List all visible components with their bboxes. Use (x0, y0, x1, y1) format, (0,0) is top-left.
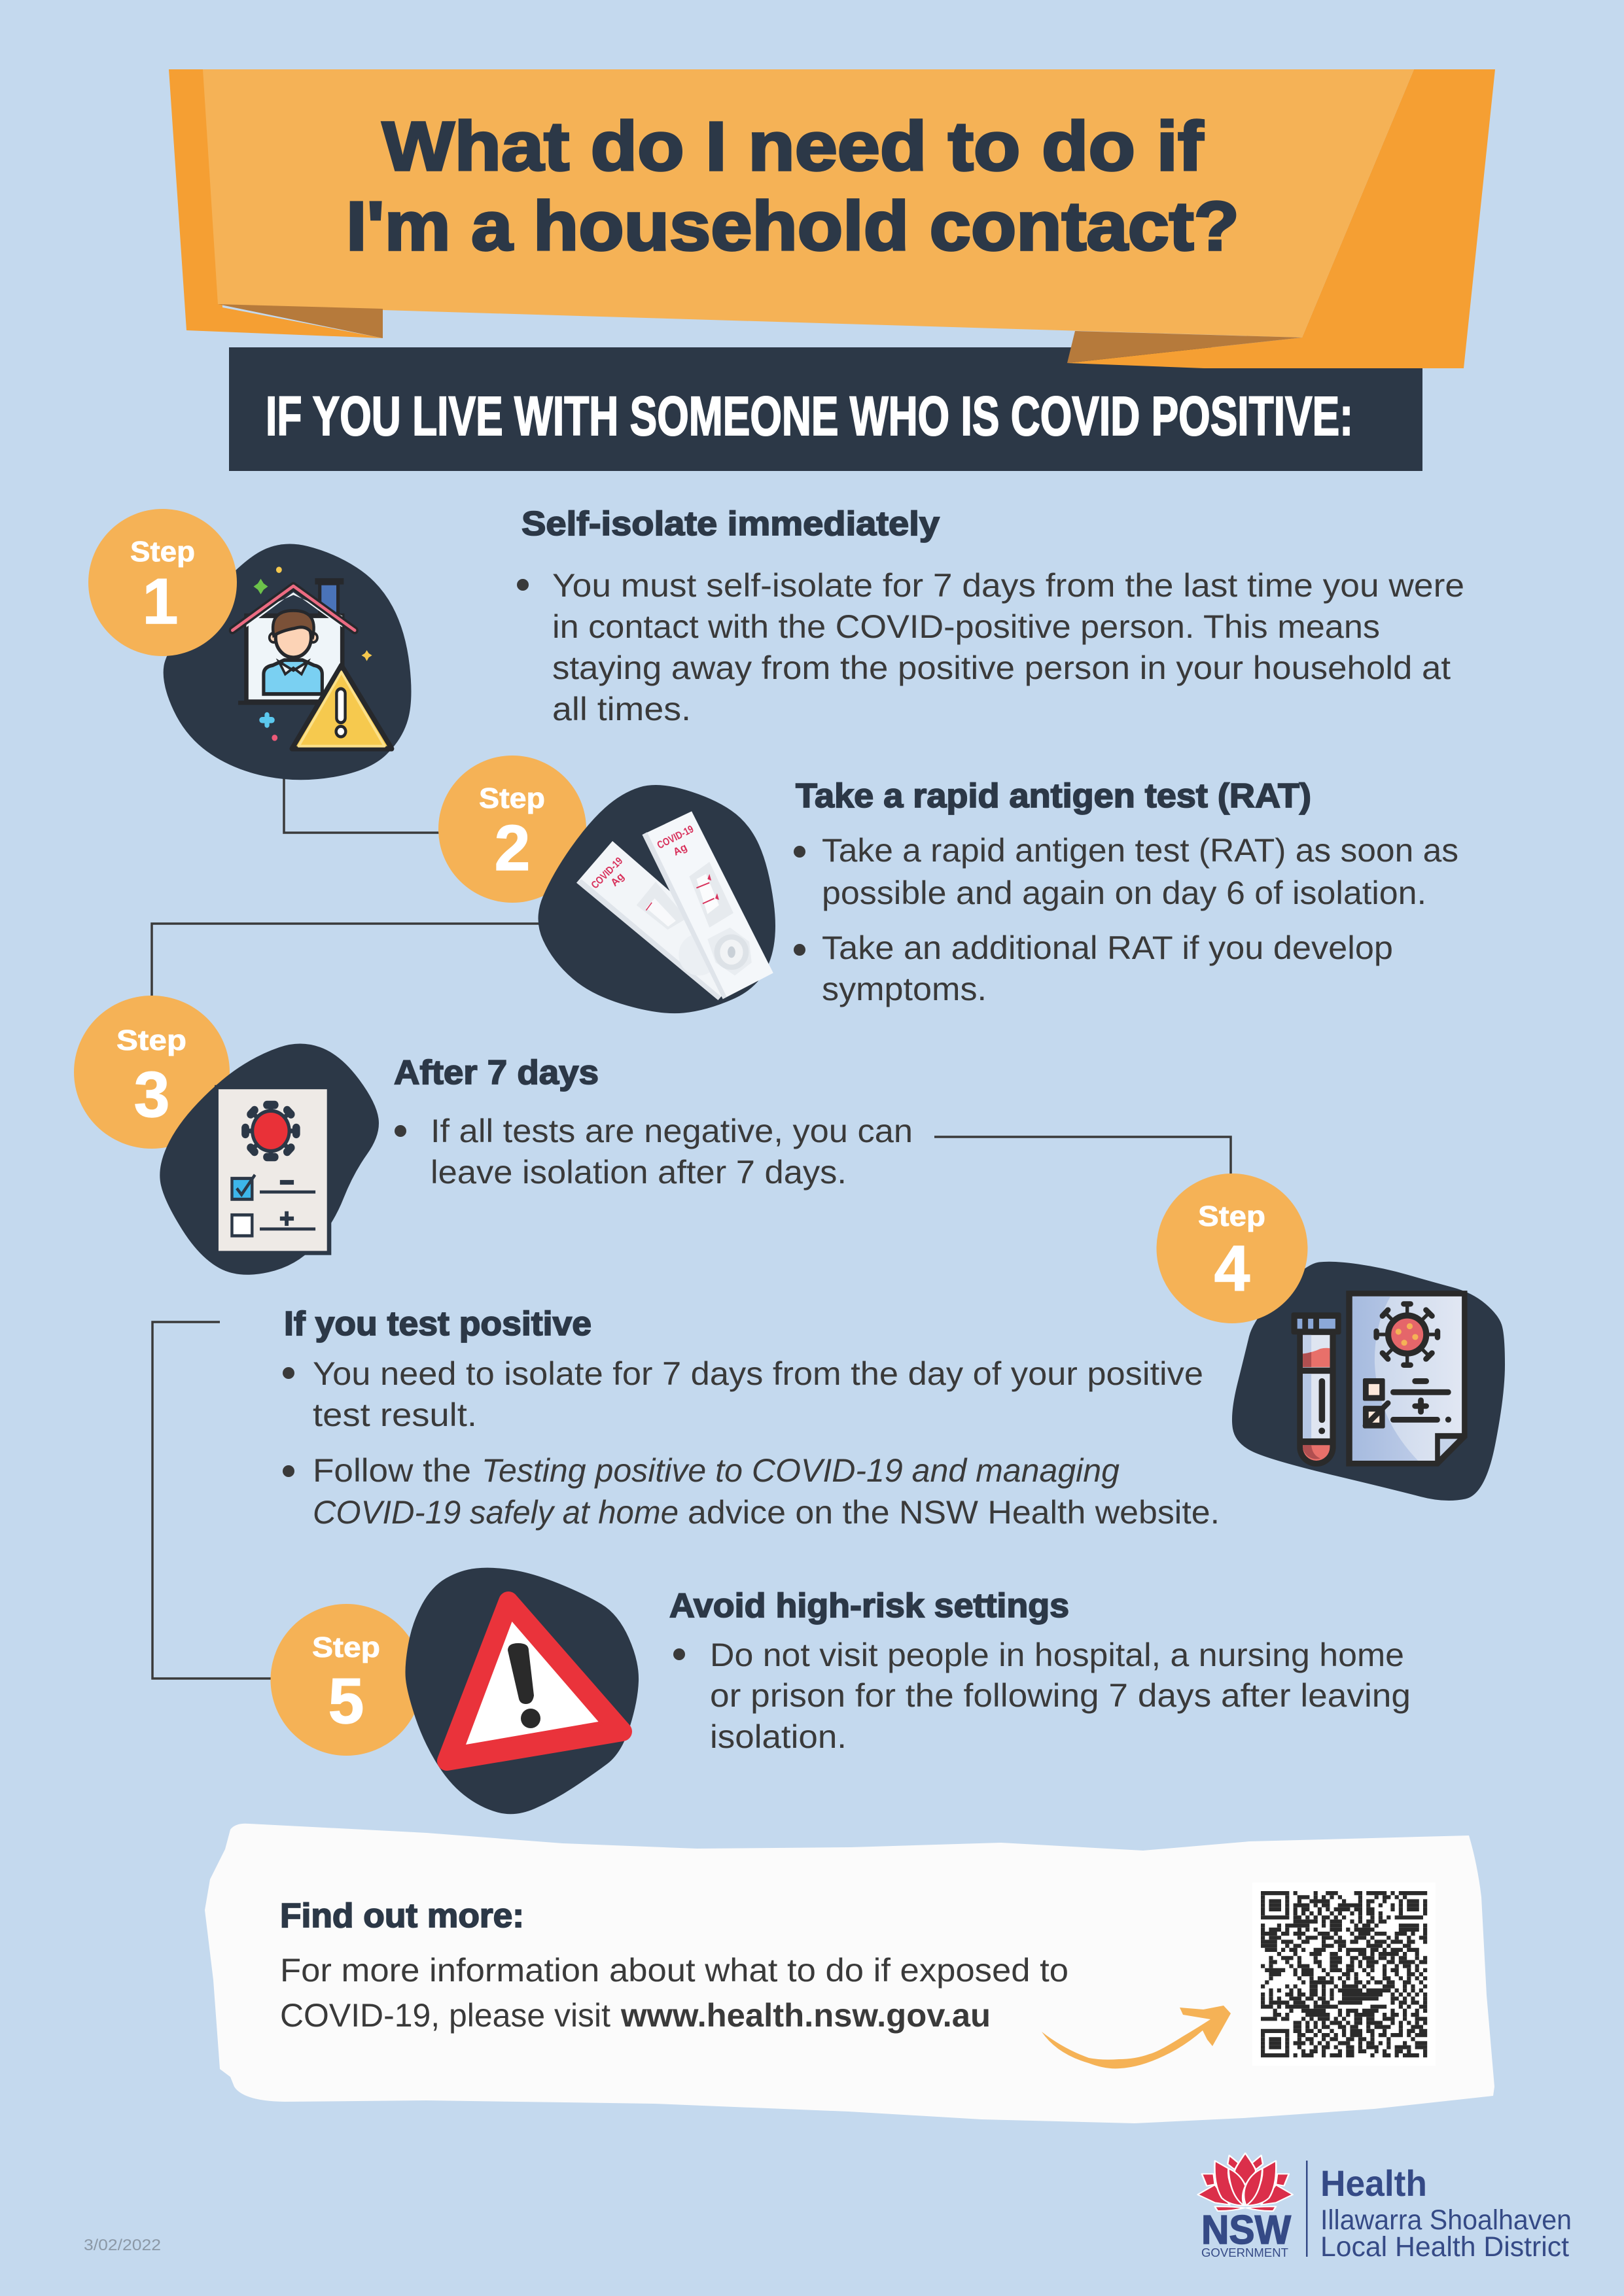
logo: NSW Government Health: Illawarra Shoalhaven (1320, 2204, 1572, 2236)
text block: take a rapid antigen test: symptoms. (822, 971, 987, 1007)
text block: if you test positive (283, 1305, 1220, 1531)
icon backdrop: step 4 blob (1232, 1262, 1505, 1501)
text block: after 7 days: leave isolation after 7 days. (431, 1154, 847, 1191)
report sheet (1346, 1291, 1468, 1467)
date: 3/02/2022 (84, 2236, 161, 2254)
text block: take a rapid antigen test: possible and again on day 6 of isolation. (822, 875, 1426, 911)
step 5 badge: Step (312, 1631, 380, 1663)
logo: NSW Government Health (1198, 2153, 1572, 2263)
test tube (1291, 1312, 1341, 1467)
arrow pointing to QR code (1042, 2006, 1231, 2068)
text block: self-isolate immediately: Self-isolate immediately (521, 505, 940, 543)
text block: self-isolate immediately (517, 505, 1464, 727)
connector: step 2 to step 3 (152, 924, 540, 997)
text block: self-isolate immediately: You must self-isolate for 7 days from the last time you were (552, 567, 1464, 604)
step 2 badge: 2 (495, 812, 530, 884)
logo: NSW Government Health: Health (1320, 2163, 1427, 2204)
step 1 badge: Step (130, 536, 195, 568)
step 4 badge (1157, 1174, 1307, 1323)
logo: NSW Government Health: Local Health District (1320, 2231, 1569, 2263)
text block: after 7 days (394, 1054, 913, 1191)
panel: find out more: www.health.nsw.gov.au (620, 1997, 991, 2034)
step 3 badge (74, 996, 230, 1149)
text block: avoid high-risk settings: isolation. (710, 1718, 847, 1755)
logo: NSW Government Health: NSW (1201, 2208, 1291, 2253)
text block: self-isolate immediately: in contact with the COVID-positive person. This means (552, 608, 1380, 645)
connector: step 3 to step 4 (934, 1137, 1231, 1175)
title banner: I'm a household contact? (346, 188, 1239, 265)
subtitle bar (229, 347, 1422, 471)
text block: take a rapid antigen test (794, 777, 1458, 1007)
text block: avoid high-risk settings: or prison for the following 7 days after leaving (710, 1677, 1411, 1714)
panel: find out more: For more information about what to do if exposed to (280, 1952, 1068, 1989)
text block: if you test positive: Follow the (313, 1452, 471, 1489)
panel: find out more (205, 1824, 1494, 2123)
icon: rapid antigen test strips: COVID-19 (656, 824, 696, 852)
text block: if you test positive: Testing positive to COVID-19 and managing (482, 1452, 1120, 1489)
icon: test result sheet (160, 1044, 379, 1275)
icon: blood tube and virus report (1291, 1291, 1468, 1467)
step 3 badge: 3 (134, 1058, 169, 1130)
text block: if you test positive: You need to isolate for 7 days from the day of your positive (313, 1355, 1203, 1392)
text block: after 7 days: After 7 days (394, 1054, 599, 1092)
text block: avoid high-risk settings (669, 1587, 1411, 1755)
QR code (1252, 1883, 1436, 2066)
icon: rapid antigen test strips: COVID-19 (590, 856, 625, 891)
text block: after 7 days: If all tests are negative, you can (431, 1113, 913, 1149)
text block: avoid high-risk settings: Do not visit people in hospital, a nursing home (710, 1637, 1404, 1673)
title banner (169, 69, 1495, 368)
logo: NSW Government Health: GOVERNMENT (1201, 2246, 1288, 2259)
step 1 badge (88, 509, 237, 656)
title banner: What do I need to do if (382, 108, 1204, 185)
step 1 badge: 1 (143, 565, 178, 637)
text block: self-isolate immediately: all times. (552, 691, 691, 727)
icon: rapid antigen test strips (538, 785, 775, 1013)
panel: find out more: Find out more: (280, 1897, 524, 1935)
panel: find out more: COVID-19, please visit (280, 1997, 610, 2034)
step 2 badge: Step (479, 782, 545, 814)
connector: step 1 to step 2 (284, 775, 440, 833)
connector: step 4 to step 5 (152, 1322, 272, 1679)
icon: rapid antigen test strips: Ag (609, 871, 627, 889)
step 3 badge: Step (116, 1024, 186, 1056)
icon backdrop: step 1 blob (164, 544, 411, 780)
text block: if you test positive: COVID-19 safely at home (313, 1494, 679, 1531)
icon: person at home with warning sign (232, 566, 392, 749)
text block: take a rapid antigen test: Take a rapid antigen test (RAT) as soon as (822, 832, 1458, 869)
icon: rapid antigen test strips: Ag (671, 842, 689, 858)
step 5 badge: 5 (328, 1665, 364, 1737)
icon: warning triangle (406, 1568, 639, 1814)
text block: take a rapid antigen test: Take an additional RAT if you develop (822, 930, 1393, 966)
step 5 badge (271, 1604, 423, 1756)
text block: if you test positive: test result. (313, 1397, 477, 1433)
step 4 badge: 4 (1214, 1232, 1250, 1304)
step 2 badge (438, 756, 586, 903)
text block: self-isolate immediately: staying away from the positive person in your household at (552, 650, 1451, 686)
text block: avoid high-risk settings: Avoid high-risk settings (669, 1587, 1069, 1625)
text block: if you test positive: advice on the NSW Health website. (688, 1494, 1220, 1531)
step 4 badge: Step (1198, 1200, 1265, 1232)
text block: if you test positive: If you test positive (284, 1305, 591, 1343)
text block: take a rapid antigen test: Take a rapid antigen test (RAT) (796, 777, 1311, 815)
